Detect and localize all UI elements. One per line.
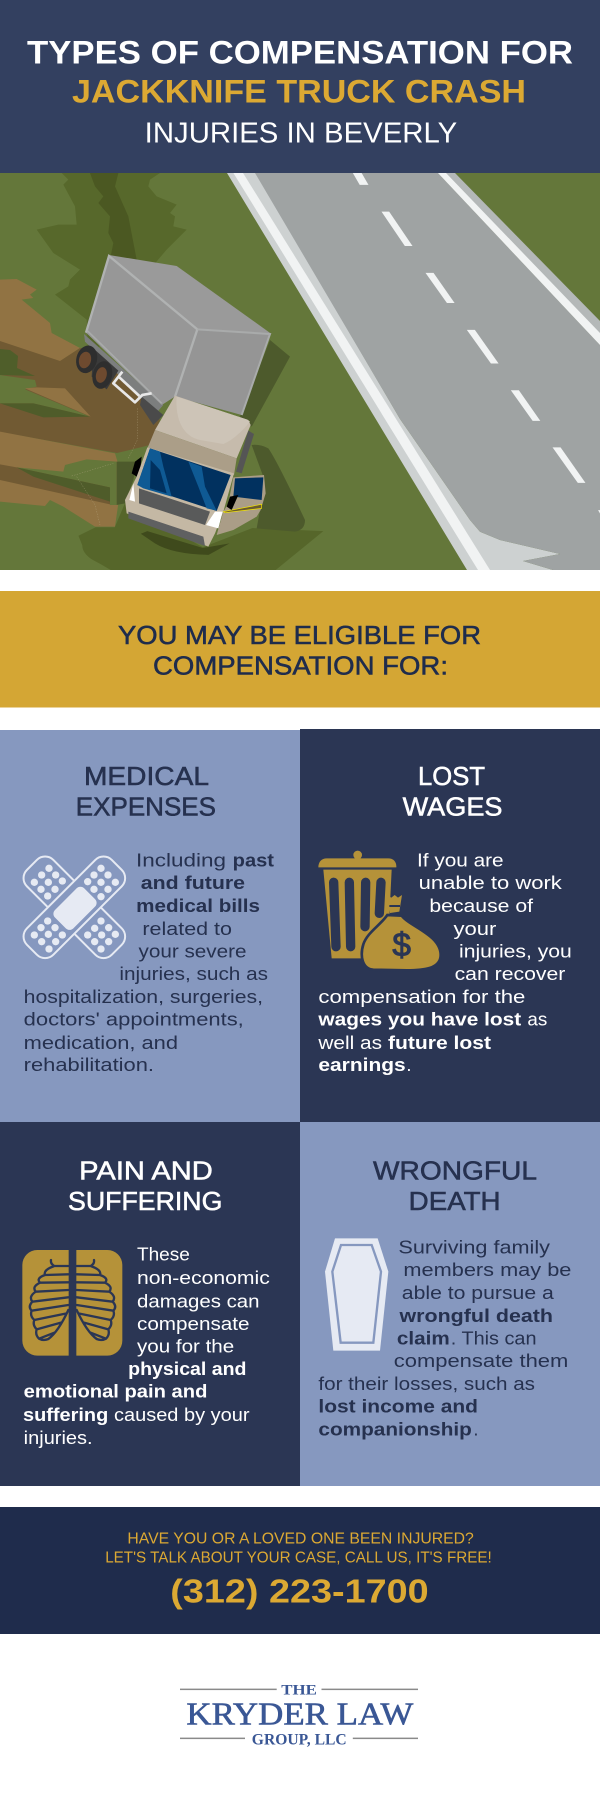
body text: lost wages: injuries, you [459, 940, 572, 962]
panel: title header [0, 0, 600, 173]
heading: lost wages: WAGES [403, 792, 502, 822]
body text: lost wages: unable to work [419, 872, 563, 893]
heading: lost wages [403, 761, 502, 822]
body text: wrongful death: Surviving family [398, 1236, 551, 1257]
body text: medical expenses: doctors' appointments, [24, 1009, 244, 1030]
logo: The Kryder Law Group, LLC: THE [281, 1682, 317, 1698]
body text: lost wages: earnings [318, 1054, 406, 1075]
body text: pain and suffering: you for the [137, 1335, 234, 1356]
panel: medical expenses [0, 730, 300, 1122]
panel: wrongful death [300, 1122, 600, 1486]
body text: wrongful death [318, 1236, 571, 1440]
icon: coffin [325, 1238, 388, 1351]
icon: crossed bandages [19, 852, 130, 963]
body text: medical expenses: injuries, such as [119, 963, 268, 984]
body text: medical expenses: your severe [138, 940, 246, 962]
heading: lost wages: LOST [418, 761, 485, 791]
body text: lost wages: can recover [455, 963, 565, 984]
body text: wrongful death: able to pursue a [402, 1282, 555, 1303]
heading: pain and suffering: SUFFERING [68, 1186, 222, 1216]
body text: pain and suffering: damages can [137, 1290, 260, 1311]
body text: wrongful death: companionship [318, 1419, 472, 1440]
body text: lost wages: as [527, 1009, 547, 1030]
body text: lost wages: wages you have lost [317, 1009, 521, 1030]
trailer box [84, 255, 271, 425]
heading: wrongful death: DEATH [409, 1186, 501, 1216]
body text: lost wages: because of [429, 895, 534, 916]
icon: trash can and money bag [318, 851, 441, 970]
title line 2: JACKKNIFE TRUCK CRASH [72, 74, 526, 110]
body text: pain and suffering: emotional pain and [24, 1381, 207, 1402]
panel: eligibility banner [0, 591, 600, 708]
body text: pain and suffering: compensate [137, 1313, 250, 1334]
title line 3: INJURIES IN BEVERLY [145, 117, 457, 149]
body text: lost wages: future lost [388, 1032, 491, 1053]
panel: lost wages [300, 729, 600, 1122]
body text: pain and suffering: caused by your [114, 1404, 250, 1425]
body text: medical expenses: rehabilitation. [24, 1054, 154, 1075]
banner heading: YOU MAY BE ELIGIBLE FOR [118, 620, 481, 650]
truck [73, 255, 271, 547]
panel: pain and suffering [0, 1122, 300, 1486]
body text: lost wages: . [406, 1054, 412, 1075]
body text: lost wages: compensation for the [318, 986, 525, 1007]
body text: medical expenses: hospitalization, surgeries, [24, 986, 263, 1007]
body text: pain and suffering: non-economic [137, 1267, 270, 1288]
banner heading: COMPENSATION FOR: [153, 651, 448, 681]
road [227, 173, 600, 570]
body text: medical expenses: and future [141, 872, 245, 893]
heading: pain and suffering: PAIN AND [79, 1155, 213, 1185]
phone number: (312) 223-1700 [170, 1573, 429, 1610]
illustration: jackknifed truck beside road [0, 173, 600, 570]
vegetation and dirt tracks [0, 173, 323, 570]
body text: wrongful death: claim [397, 1327, 450, 1348]
call to action text: HAVE YOU OR A LOVED ONE BEEN INJURED? [127, 1530, 474, 1547]
icon: trash can and money bag: $ [392, 927, 411, 964]
body text: medical expenses [24, 849, 274, 1075]
body text: pain and suffering: injuries. [24, 1427, 93, 1448]
body text: pain and suffering: These [137, 1244, 190, 1265]
heading: pain and suffering [68, 1155, 222, 1216]
hitch bracket [113, 372, 152, 402]
body text: pain and suffering [23, 1244, 270, 1448]
logo: The Kryder Law Group, LLC: KRYDER LAW [186, 1695, 414, 1731]
body text: medical expenses: related to [142, 918, 232, 939]
logo: The Kryder Law Group, LLC: GROUP, LLC [252, 1731, 347, 1748]
body text: pain and suffering: suffering [23, 1404, 108, 1425]
icon: rib cage [22, 1248, 122, 1357]
body text: medical expenses: Including [136, 849, 226, 870]
call to action text [105, 1530, 492, 1566]
body text: medical expenses: medical bills [136, 895, 260, 916]
heading: wrongful death [373, 1155, 537, 1216]
open door [217, 475, 266, 535]
heading: wrongful death: WRONGFUL [373, 1155, 537, 1185]
wheels [76, 346, 118, 390]
call to action text: LET'S TALK ABOUT YOUR CASE, CALL US, IT'S FREE! [105, 1549, 492, 1566]
heading: medical expenses: EXPENSES [76, 792, 216, 822]
banner heading [118, 620, 481, 681]
heading: medical expenses [76, 761, 216, 822]
title line 1: TYPES OF COMPENSATION FOR [27, 34, 573, 70]
body text: medical expenses: medication, and [24, 1032, 178, 1053]
body text: medical expenses: past [233, 849, 274, 870]
body text: wrongful death: . This can [451, 1327, 536, 1348]
heading: medical expenses: MEDICAL [84, 761, 209, 791]
body text: pain and suffering: physical and [128, 1358, 246, 1379]
logo: The Kryder Law Group, LLC [180, 1682, 418, 1748]
body text: lost wages: well as [317, 1032, 382, 1053]
panel: call to action footer [0, 1507, 600, 1634]
body text: wrongful death: compensate them [394, 1350, 568, 1371]
body text: wrongful death: members may be [403, 1259, 571, 1280]
body text: wrongful death: for their losses, such as [318, 1373, 535, 1394]
body text: wrongful death: lost income and [318, 1396, 478, 1417]
cab [125, 396, 254, 547]
body text: wrongful death: wrongful death [398, 1305, 553, 1326]
body text: lost wages: If you are [417, 849, 504, 870]
body text: lost wages [317, 849, 572, 1075]
body text: wrongful death: . [473, 1419, 479, 1440]
body text: lost wages: your [454, 918, 496, 939]
